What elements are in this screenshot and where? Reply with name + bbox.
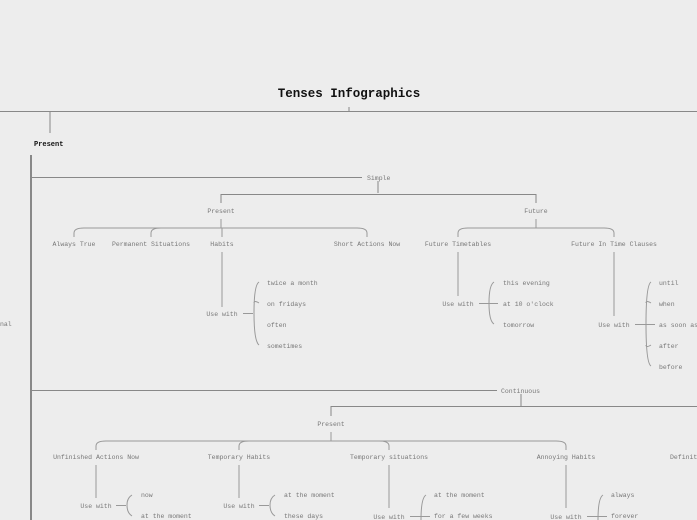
branch: simple present: often <box>267 322 287 329</box>
panel: Continuous: forever <box>611 513 638 520</box>
branch: simple present: sometimes <box>267 343 302 350</box>
heading: Present: Present <box>34 141 63 149</box>
branch: simple future <box>425 208 697 371</box>
branch: simple future: until <box>659 280 679 287</box>
branch: simple future: after <box>659 343 679 350</box>
panel: Continuous: Use with <box>80 503 112 510</box>
panel: Continuous: these days <box>284 513 323 520</box>
panel: Continuous: at the moment <box>434 492 485 499</box>
panel: Continuous: Continuous <box>501 388 540 395</box>
panel: Continuous: at the moment <box>141 513 192 520</box>
panel: Simple <box>53 175 697 371</box>
branch: simple present: Use with <box>206 311 238 318</box>
branch: simple present: Always True <box>53 241 96 248</box>
panel: Continuous: Present <box>317 421 345 428</box>
panel: Continuous: Temporary situations <box>350 454 428 461</box>
title: Tenses Infographics <box>278 87 420 101</box>
panel: Continuous: always <box>611 492 635 499</box>
text: cut-off label: nal <box>0 321 12 328</box>
panel: Continuous: Definit <box>670 454 697 461</box>
panel: Continuous <box>53 388 697 520</box>
branch: simple future: Future In Time Clauses <box>571 241 657 248</box>
branch: simple future: Use with <box>598 322 630 329</box>
branch: simple future: Future Timetables <box>425 241 491 248</box>
panel: Simple: Simple <box>367 175 391 182</box>
panel: Continuous: for a few weeks <box>434 513 493 520</box>
branch: simple present <box>53 208 400 350</box>
branch: simple future: Future <box>524 208 548 215</box>
branch: simple future: tomorrow <box>503 322 534 329</box>
branch: simple present: Habits <box>210 241 234 248</box>
branch: simple present: Present <box>207 208 235 215</box>
branch: simple present: on fridays <box>267 301 306 308</box>
panel: Continuous: Use with <box>223 503 255 510</box>
branch: simple present: twice a month <box>267 280 318 287</box>
panel: Continuous: Annoying Habits <box>537 454 595 461</box>
branch: simple future: as soon as <box>659 322 697 329</box>
branch: simple present: Short Actions Now <box>334 241 400 248</box>
panel: Continuous: now <box>141 492 153 499</box>
branch: simple future: this evening <box>503 280 550 287</box>
branch: simple future: Use with <box>442 301 474 308</box>
branch: simple future: before <box>659 364 683 371</box>
branch: simple future: at 10 o'clock <box>503 301 554 308</box>
branch: simple present: Permanent Situations <box>112 241 190 248</box>
panel: Continuous: Temporary Habits <box>208 454 270 461</box>
panel: Continuous: Unfinished Actions Now <box>53 454 139 461</box>
branch: simple future: when <box>659 301 675 308</box>
panel: Continuous: at the moment <box>284 492 335 499</box>
